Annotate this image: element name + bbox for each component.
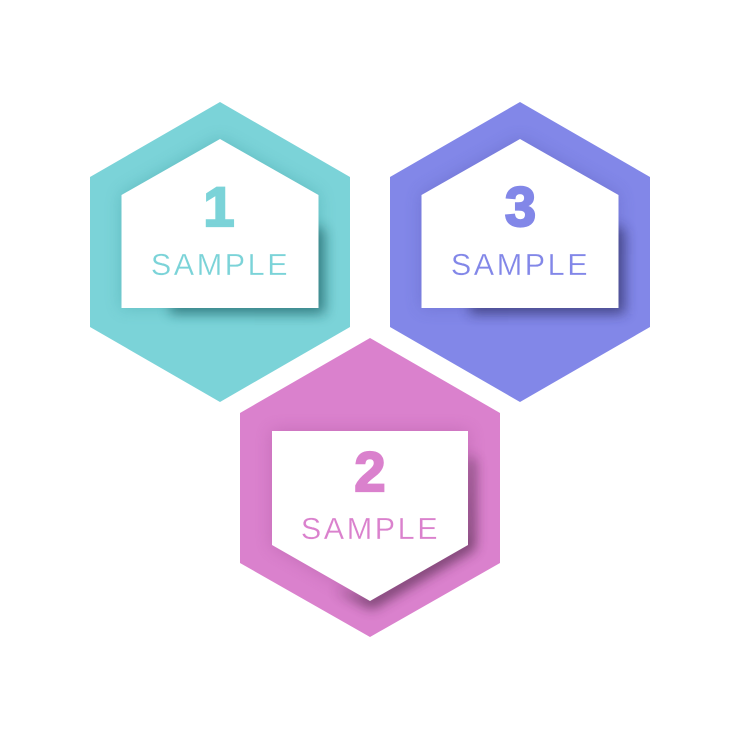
label: sample 2: SAMPLE xyxy=(301,512,440,546)
number 1: 1 xyxy=(203,175,235,238)
hexagon 1 card shadow xyxy=(122,139,325,314)
panel: hexagon 3 xyxy=(390,102,650,402)
hexagon 3 card shadow xyxy=(422,139,625,314)
hexagon 1 white card xyxy=(122,139,318,308)
panel: hexagon 2 xyxy=(240,338,500,637)
hexagon 3 white card xyxy=(422,139,618,308)
number 2: 2 xyxy=(354,440,386,503)
label: sample 1: SAMPLE xyxy=(151,248,290,282)
number 3: 3 xyxy=(505,175,536,238)
panel: hexagon 1 xyxy=(90,102,350,402)
label: sample 3: SAMPLE xyxy=(451,248,590,282)
hexagon 2 white card xyxy=(272,431,468,601)
hexagon 2 card shadow xyxy=(272,431,475,609)
hexagon 2 background xyxy=(240,338,500,637)
hexagon 3 background xyxy=(390,102,650,402)
hexagon 1 background xyxy=(90,102,350,402)
